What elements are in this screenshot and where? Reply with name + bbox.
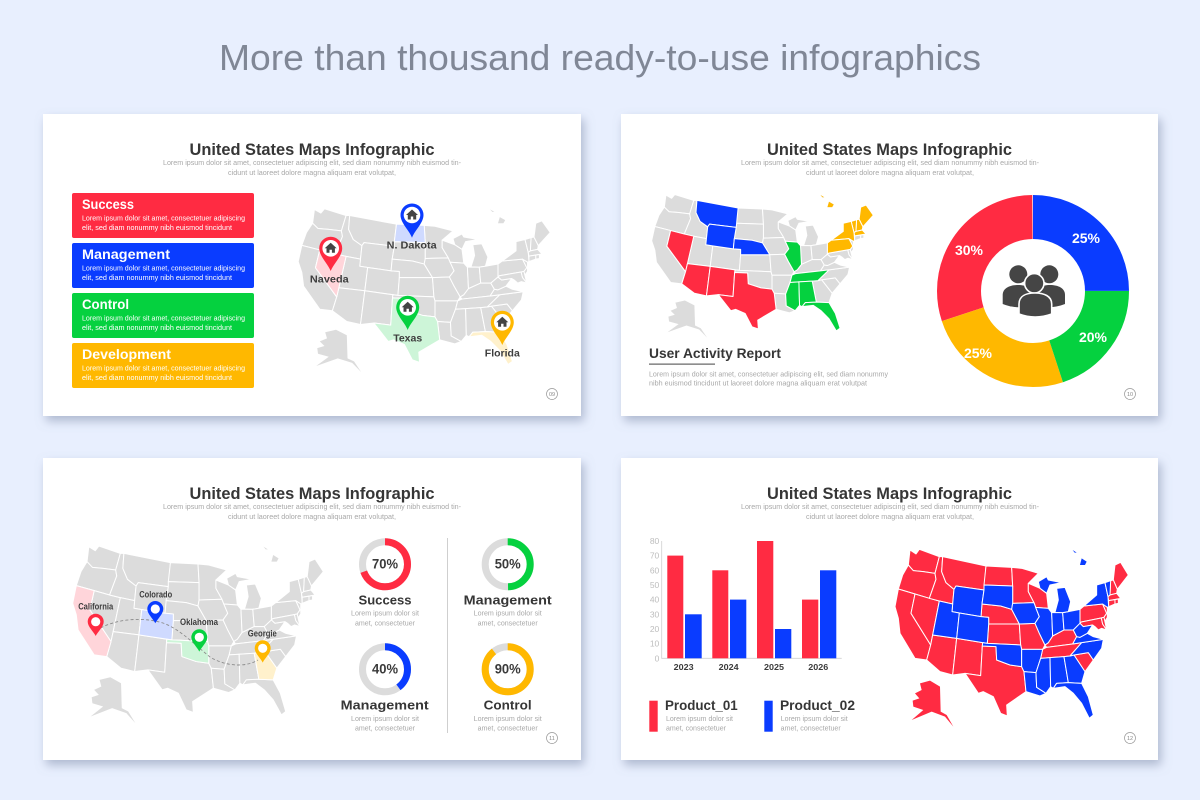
pin: Florida <box>485 311 520 360</box>
pin: N. Dakota <box>387 204 437 252</box>
bar chart: 40 <box>650 595 660 605</box>
legend: Product_02 <box>764 698 855 733</box>
card: Control: Lorem ipsum dolor sit amet, consectetuer adipiscing <box>82 316 245 322</box>
icon: people group <box>1003 265 1065 317</box>
page number 10: 10 <box>1127 392 1133 398</box>
intro text <box>163 160 462 177</box>
legend: Product_02: amet, consectetuer <box>781 726 841 733</box>
bar chart: 2024 <box>719 662 739 672</box>
ring: Management 40%: Lorem ipsum dolor sit <box>351 716 419 723</box>
US map: red and blue states <box>895 549 1128 727</box>
panel: slide 12 bar chart and red/blue map <box>621 458 1158 760</box>
pin: California <box>78 601 114 636</box>
card: Development: Development <box>82 347 172 362</box>
bar chart: 10 <box>650 639 660 649</box>
heading: United States Maps Infographic <box>767 141 1012 159</box>
ring: Control 90%: Control <box>484 697 532 712</box>
ring: Success 70%: amet, consectetuer <box>355 620 416 627</box>
pin: California: California <box>78 601 114 611</box>
intro text: Lorem ipsum dolor sit amet, consectetuer adipiscing elit, sed diam nonummy nibh euismod tin- <box>741 504 1040 511</box>
donut chart: 25% <box>1072 230 1101 246</box>
intro text: Lorem ipsum dolor sit amet, consectetuer adipiscing elit, sed diam nonummy nibh euismod tin- <box>163 504 462 511</box>
ring: Management 40%: 40% <box>372 662 398 677</box>
intro text <box>163 504 462 521</box>
dashed route <box>101 619 258 665</box>
pin: Florida: Florida <box>485 348 520 360</box>
legend: Product_02: Product_02 <box>780 698 855 713</box>
pin: Naveda <box>310 237 349 286</box>
report heading: User Activity Report <box>649 346 782 361</box>
page number 11 <box>546 732 558 744</box>
legend: Product_01: Lorem ipsum dolor sit <box>666 716 733 723</box>
page title: More than thousand ready-to-use infographics <box>219 37 981 78</box>
intro text: Lorem ipsum dolor sit amet, consectetuer adipiscing elit, sed diam nonummy nibh euismod tin- <box>163 160 462 167</box>
pin: Georgie: Georgie <box>248 629 277 639</box>
intro text: cidunt ut laoreet dolore magna aliquam erat volutpat, <box>806 170 974 177</box>
pin: Naveda: Naveda <box>310 274 349 286</box>
page number 10 <box>1124 388 1136 400</box>
US map with highlighted states <box>73 546 323 723</box>
pin: N. Dakota: N. Dakota <box>387 240 437 252</box>
bar chart: 80 <box>650 536 660 546</box>
legend: Product_02: Lorem ipsum dolor sit <box>781 716 848 723</box>
ring: Management 40%: amet, consectetuer <box>355 726 416 733</box>
page number 09: 09 <box>549 392 555 398</box>
report text <box>649 372 888 388</box>
ring: Control 90% <box>474 647 542 733</box>
bar chart: 20 <box>650 624 660 634</box>
card: Development: Lorem ipsum dolor sit amet, consectetuer adipiscing <box>82 366 245 372</box>
donut chart: 30% <box>955 242 984 258</box>
report text: Lorem ipsum dolor sit amet, consectetuer adipiscing elit, sed diam nonummy <box>649 372 888 379</box>
panel: slide 10 activity map and donut <box>621 114 1158 416</box>
ring: Success 70%: Success <box>358 592 412 607</box>
intro text <box>741 160 1040 177</box>
ring: Success 70%: 70% <box>372 557 398 572</box>
page number 09 <box>546 388 558 400</box>
bar chart: 0 <box>655 653 660 663</box>
page number 11: 11 <box>549 736 555 742</box>
heading: United States Maps Infographic <box>767 485 1012 503</box>
card: Control: elit, sed diam nonummy nibh euismod tincidunt <box>82 325 232 332</box>
ring: Control 90%: Lorem ipsum dolor sit <box>474 716 542 723</box>
pin: Georgie <box>248 629 277 663</box>
bar chart <box>650 536 842 672</box>
pin: Texas <box>393 296 422 345</box>
card: Success: Lorem ipsum dolor sit amet, consectetuer adipiscing <box>82 216 245 222</box>
pin: Oklahoma <box>180 617 219 652</box>
ring: Management 50%: Lorem ipsum dolor sit <box>474 611 542 618</box>
card: Success <box>72 193 254 238</box>
card: Success: elit, sed diam nonummy nibh euismod tincidunt <box>82 225 232 232</box>
donut chart: 25% <box>964 345 993 361</box>
US map with highlighted states <box>298 209 550 372</box>
ring: Management 50%: 50% <box>495 557 521 572</box>
legend: Product_01: amet, consectetuer <box>666 726 727 733</box>
intro text: cidunt ut laoreet dolore magna aliquam erat volutpat, <box>806 514 974 521</box>
card: Development <box>72 343 254 388</box>
ring: Management 50%: amet, consectetuer <box>478 620 538 627</box>
intro text: Lorem ipsum dolor sit amet, consectetuer adipiscing elit, sed diam nonummy nibh euismod tin- <box>741 160 1040 167</box>
bar chart: 30 <box>650 609 660 619</box>
card: Control: Control <box>82 297 129 312</box>
ring: Management 40% <box>341 647 429 733</box>
bar chart: 2025 <box>764 662 784 672</box>
card: Management <box>72 243 254 288</box>
pin: Colorado <box>139 590 173 623</box>
card: Management: elit, sed diam nonummy nibh euismod tincidunt <box>82 275 232 282</box>
pin: Colorado: Colorado <box>139 590 173 600</box>
ring: Management 40%: Management <box>341 697 429 712</box>
pin: Texas: Texas <box>393 333 422 345</box>
ring: Control 90%: 90% <box>495 662 521 677</box>
card: Development: elit, sed diam nonummy nibh euismod tincidunt <box>82 375 232 382</box>
bar chart: 2026 <box>808 662 829 672</box>
pin: Oklahoma: Oklahoma <box>180 617 219 627</box>
panel: slide 11 route map and progress rings <box>43 458 581 760</box>
heading: United States Maps Infographic <box>190 141 434 159</box>
intro text: cidunt ut laoreet dolore magna aliquam erat volutpat, <box>228 170 396 177</box>
panel: slide 09 state list and pin map <box>43 114 581 416</box>
bar chart: 70 <box>650 551 660 561</box>
ring: Management 50% <box>464 542 552 627</box>
bar chart: 2023 <box>674 662 694 672</box>
card: Control <box>72 293 254 338</box>
donut chart: 20% <box>1079 329 1108 345</box>
card: Management: Lorem ipsum dolor sit amet, consectetuer adipiscing <box>82 266 245 272</box>
ring: Control 90%: amet, consectetuer <box>478 726 538 733</box>
page number 12: 12 <box>1127 736 1133 742</box>
heading: United States Maps Infographic <box>190 485 434 503</box>
ring: Management 50%: Management <box>464 592 552 607</box>
card: Success: Success <box>82 197 134 212</box>
card: Management: Management <box>82 247 171 262</box>
ring: Success 70%: Lorem ipsum dolor sit <box>351 611 419 618</box>
donut chart <box>955 217 1108 365</box>
bar chart: 50 <box>650 580 660 590</box>
page number 12 <box>1124 732 1136 744</box>
ring: Success 70% <box>351 542 419 627</box>
US map with colored state groups <box>652 195 873 338</box>
intro text <box>741 504 1040 521</box>
intro text: cidunt ut laoreet dolore magna aliquam erat volutpat, <box>228 514 396 521</box>
legend: Product_01: Product_01 <box>665 698 738 713</box>
legend: Product_01 <box>649 698 738 733</box>
bar chart: 60 <box>650 565 660 575</box>
report text: nibh euismod tincidunt ut laoreet dolore magna aliquam erat volutpat <box>649 381 867 388</box>
